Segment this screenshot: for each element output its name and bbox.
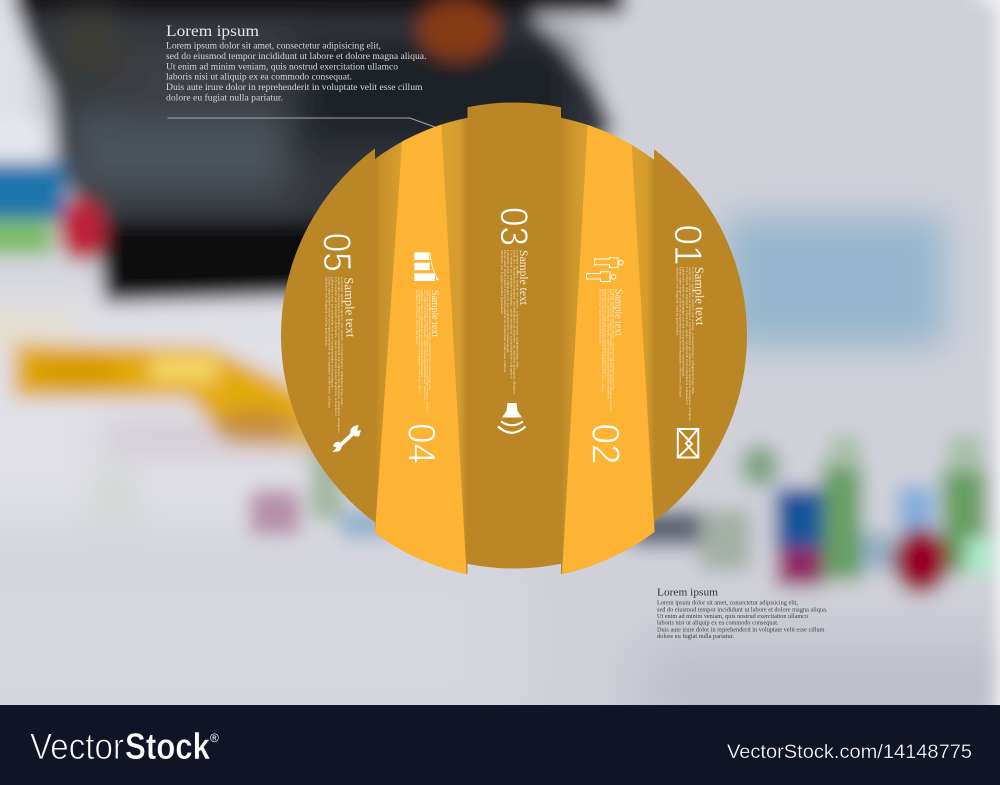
body 04: Duis aute irure dolor in reprehenderit in voluptate velit esse cillum (418, 290, 421, 394)
body 03: dolore eu fugiat nulla pariatur. (500, 250, 504, 315)
body 05: Duis aute irure dolor in reprehenderit in voluptate velit esse cillum (328, 277, 332, 409)
footer id: VectorStock.com/14148775 (727, 741, 972, 763)
body 05: laboris nisi ut aliquip ex ea commodo consequat. (331, 277, 335, 389)
label 02: Sample text (612, 289, 624, 336)
number 03: 03 (492, 207, 535, 246)
body 05: Lorem ipsum dolor sit amet, consectetur adipisicing elit, (339, 277, 344, 406)
bottom text block: Lorem ipsum (657, 587, 718, 599)
top text block: sed do eiusmod tempor incididunt ut labore et dolore magna aliqua. (166, 52, 426, 62)
number 04: 04 (400, 423, 442, 464)
top text block: dolore eu fugiat nulla pariatur. (166, 92, 283, 104)
body 04: Lorem ipsum dolor sit amet, consectetur adipisicing elit, (428, 290, 431, 391)
segment 01 content (666, 224, 709, 458)
label 05: Sample text (342, 277, 358, 338)
body 01: Lorem ipsum dolor sit amet, consectetur adipisicing elit, (690, 267, 695, 395)
label 04: Sample text (429, 290, 440, 337)
bottom text block: sed do eiusmod tempor incididunt ut labore et dolore magna aliqua. (657, 606, 828, 613)
icon: speaker bell (498, 403, 526, 433)
icon: bars (414, 252, 439, 281)
segment 04 content (400, 252, 442, 464)
top text block: Lorem ipsum (166, 23, 260, 40)
body 01: Ut enim ad minim veniam, quis nostrud exercitation ullamco (684, 267, 689, 405)
footer bar (0, 705, 1000, 785)
body 01: Duis aute irure dolor in reprehenderit in voluptate velit esse cillum (679, 267, 683, 398)
footer logo: Vector (30, 726, 124, 767)
body 03 (500, 250, 520, 395)
bottom text block: Ut enim ad minim veniam, quis nostrud exercitation ullamco (657, 613, 808, 620)
body 02: sed do eiusmod tempor incididunt ut labore et dolore magna aliqua. (609, 289, 612, 412)
body 04 (415, 290, 431, 413)
top text block (166, 23, 426, 104)
footer logo (30, 726, 219, 767)
body 02: Ut enim ad minim veniam, quis nostrud exercitation ullamco (606, 289, 609, 400)
body 01: laboris nisi ut aliquip ex ea commodo consequat. (682, 267, 686, 378)
strip 03 centre (468, 90, 561, 580)
segment 01 base (654, 149, 747, 522)
body 02: laboris nisi ut aliquip ex ea commodo consequat. (604, 289, 607, 377)
body 01: sed do eiusmod tempor incididunt ut labore et dolore magna aliqua. (688, 267, 692, 422)
body 02: Duis aute irure dolor in reprehenderit in voluptate velit esse cillum (601, 289, 604, 393)
body 02 (598, 289, 614, 412)
bottom text block: dolore eu fugiat nulla pariatur. (657, 633, 734, 640)
footer logo: Stock (125, 726, 210, 767)
body 03: sed do eiusmod tempor incididunt ut labore et dolore magna aliqua. (512, 250, 516, 395)
body 01 (676, 267, 695, 422)
number 01: 01 (666, 224, 709, 266)
icon: envelope (678, 429, 698, 458)
segment 03 content (492, 207, 535, 433)
bottom text block (657, 587, 828, 640)
body 05 (324, 277, 344, 433)
leader line (168, 118, 436, 128)
body 03: Lorem ipsum dolor sit amet, consectetur adipisicing elit, (514, 250, 520, 369)
strip 04 (375, 100, 468, 600)
bottom text block: laboris nisi ut aliquip ex ea commodo consequat. (657, 620, 779, 627)
body 04: Ut enim ad minim veniam, quis nostrud exercitation ullamco (423, 290, 426, 401)
body 04: sed do eiusmod tempor incididunt ut labore et dolore magna aliqua. (425, 290, 428, 413)
number 05: 05 (315, 232, 358, 272)
top text block: laboris nisi ut aliquip ex ea commodo consequat. (166, 73, 352, 83)
body 04: dolore eu fugiat nulla pariatur. (415, 290, 418, 345)
body 03: Ut enim ad minim veniam, quis nostrud exercitation ullamco (508, 250, 513, 379)
body 05: sed do eiusmod tempor incididunt ut labore et dolore magna aliqua. (337, 277, 341, 433)
body 03: Duis aute irure dolor in reprehenderit in voluptate velit esse cillum (503, 250, 507, 372)
segment 05 base (281, 148, 375, 522)
body 03: laboris nisi ut aliquip ex ea commodo consequat. (506, 250, 510, 354)
number 02: 02 (584, 424, 626, 464)
icon: people (586, 258, 623, 282)
bottom text block: Duis aute irure dolor in reprehenderit in voluptate velit esse cillum (657, 626, 825, 633)
label 03: Sample text (517, 250, 531, 306)
top text block: Duis aute irure dolor in reprehenderit in voluptate velit esse cillum (166, 83, 423, 93)
bottom text block: Lorem ipsum dolor sit amet, consectetur adipisicing elit, (657, 600, 798, 606)
body 05: dolore eu fugiat nulla pariatur. (324, 277, 328, 347)
top text block: Ut enim ad minim veniam, quis nostrud exercitation ullamco (166, 62, 398, 72)
segment 05 content (315, 232, 360, 451)
top text block: Lorem ipsum dolor sit amet, consectetur adipisicing elit, (166, 42, 381, 52)
body 01: dolore eu fugiat nulla pariatur. (676, 267, 680, 337)
body 04: laboris nisi ut aliquip ex ea commodo consequat. (420, 290, 423, 378)
body 02: dolore eu fugiat nulla pariatur. (598, 289, 602, 344)
strip 02 (560, 100, 654, 600)
body 02: Lorem ipsum dolor sit amet, consectetur adipisicing elit, (612, 289, 614, 390)
body 05: Ut enim ad minim veniam, quis nostrud exercitation ullamco (333, 277, 338, 416)
footer logo: ® (210, 731, 219, 745)
icon: wrench (334, 426, 360, 451)
segment 02 content (584, 258, 626, 464)
label 01: Sample text (692, 267, 707, 326)
panel: circle with folded strips (281, 102, 747, 574)
